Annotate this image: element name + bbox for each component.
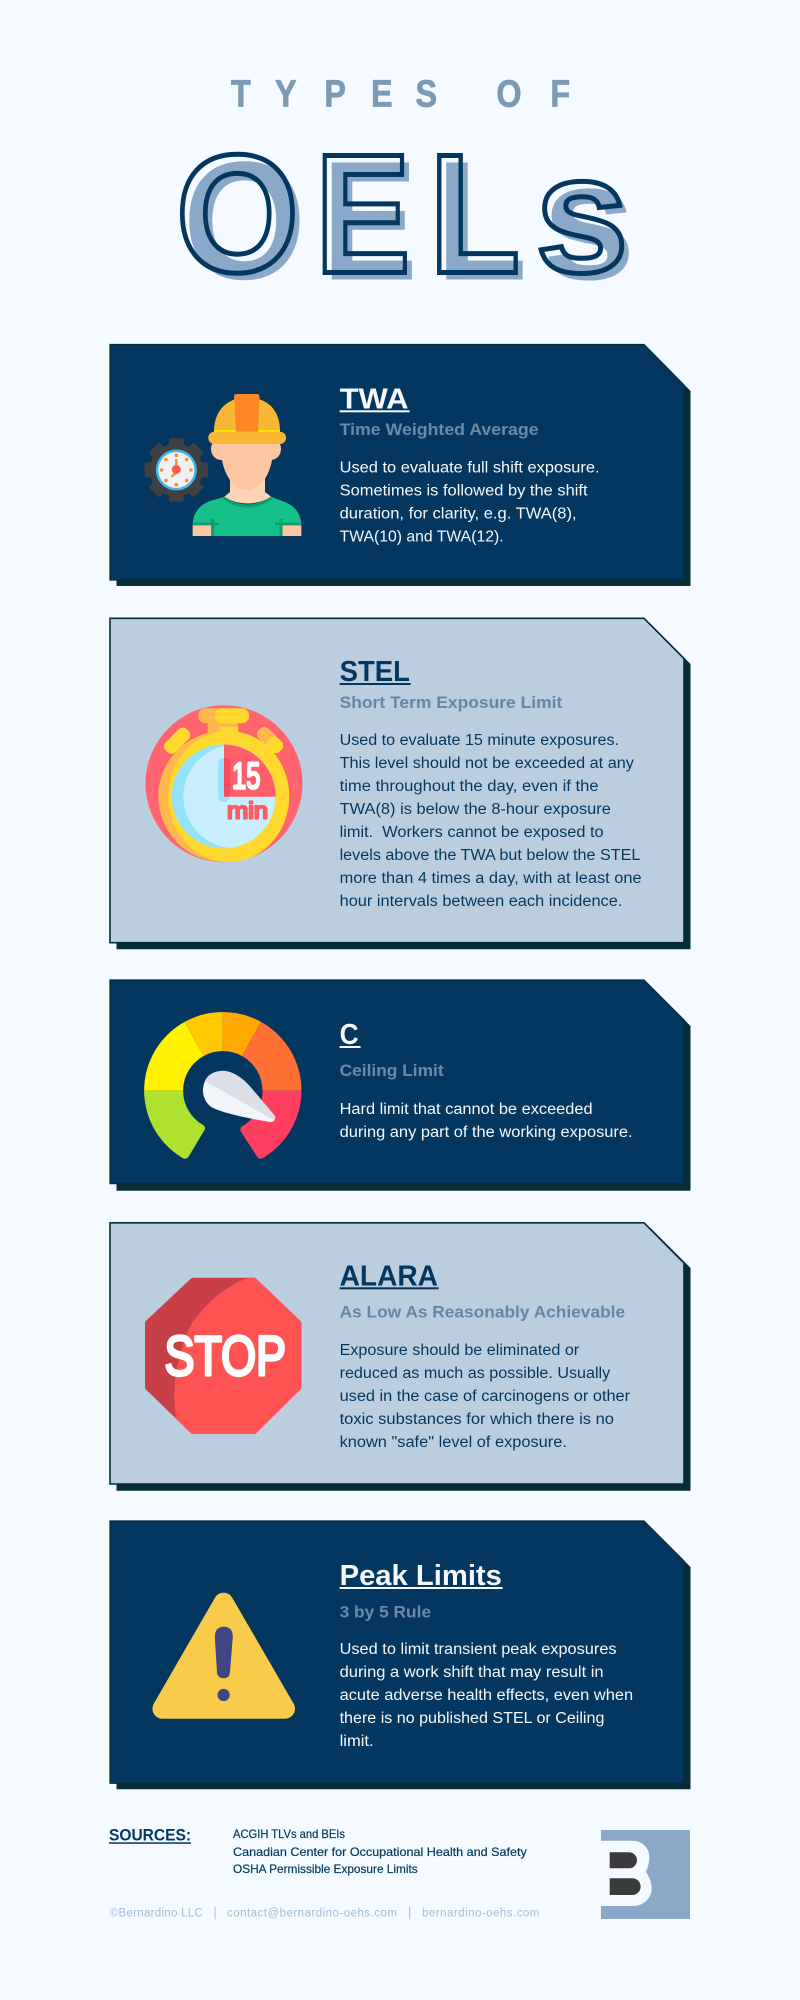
icon: warning triangle <box>162 1603 285 1709</box>
sources list: Canadian Center for Occupational Health and Safety <box>233 1845 527 1859</box>
subheading: Short Term Exposure Limit <box>340 693 563 712</box>
body text: Used to limit transient peak exposures <box>340 1641 617 1658</box>
body text: duration, for clarity, e.g. TWA(8), <box>340 506 577 523</box>
body text: Exposure should be eliminated or <box>340 1342 579 1359</box>
subheading: Time Weighted Average <box>340 420 539 439</box>
subheading: Ceiling Limit <box>340 1061 444 1080</box>
subheading: 3 by 5 Rule <box>340 1602 431 1621</box>
body text: TWA(8) is below the 8-hour exposure <box>340 801 611 818</box>
title: OELs: L <box>436 125 527 316</box>
card background <box>110 344 690 586</box>
title: OELs: E <box>322 127 417 316</box>
body text <box>340 1641 633 1750</box>
card background <box>110 980 690 1191</box>
icon: stop sign <box>148 1281 298 1431</box>
body text: during any part of the working exposure. <box>340 1124 633 1141</box>
heading: ALARA: ALARA <box>340 1260 438 1292</box>
body text <box>340 1342 630 1451</box>
title: OELs: O <box>183 126 306 315</box>
title: Types of: TYPES OF <box>231 73 570 115</box>
heading: STEL: STEL <box>340 656 410 688</box>
body text <box>340 732 642 910</box>
body text: levels above the TWA but below the STEL <box>340 847 641 864</box>
panel: ALARA <box>110 1223 690 1491</box>
body text: This level should not be exceeded at any <box>340 755 634 772</box>
body text: Used to evaluate 15 minute exposures. <box>340 732 619 749</box>
body text: Sometimes is followed by the shift <box>340 483 588 500</box>
icon: 15 minute stopwatch: min <box>227 797 268 823</box>
body text: toxic substances for which there is no <box>340 1411 614 1428</box>
heading: TWA: TWA <box>340 383 409 415</box>
icon: 15 minute stopwatch: 15 <box>232 755 260 797</box>
title: OELs: s <box>542 127 636 315</box>
body text: limit. <box>340 1733 374 1750</box>
sources list <box>233 1827 527 1876</box>
footer contact line: bernardino-oehs.com <box>422 1908 539 1920</box>
panel: Ceiling <box>110 980 690 1191</box>
sources list: OSHA Permissible Exposure Limits <box>233 1862 418 1876</box>
sources list: ACGIH TLVs and BEIs <box>233 1827 345 1841</box>
body text: time throughout the day, even if the <box>340 778 599 795</box>
body text: reduced as much as possible. Usually <box>340 1365 610 1382</box>
logo: Bernardino B <box>601 1830 690 1919</box>
card background <box>110 1223 690 1491</box>
title: OELs: O <box>176 119 299 308</box>
panel: TWA <box>110 344 690 586</box>
body text: TWA(10) and TWA(12). <box>340 529 504 546</box>
body text: used in the case of carcinogens or other <box>340 1388 630 1405</box>
title: OELs: s <box>535 120 629 308</box>
icon: stop sign: STOP <box>164 1324 286 1387</box>
footer contact line <box>110 1907 539 1920</box>
body text: acute adverse health effects, even when <box>340 1687 633 1704</box>
panel: STEL <box>110 618 690 949</box>
body text <box>340 1101 633 1141</box>
body text: there is no published STEL or Ceiling <box>340 1710 604 1727</box>
footer contact line: ©Bernardino LLC <box>110 1908 203 1920</box>
panel: Peak Limits <box>110 1521 690 1789</box>
icon: 15 minute stopwatch <box>146 705 302 862</box>
body text: hour intervals between each incidence. <box>340 893 622 910</box>
title: OELs <box>176 118 636 316</box>
body text: during a work shift that may result in <box>340 1664 604 1681</box>
subheading: As Low As Reasonably Achievable <box>340 1302 625 1321</box>
body text: known "safe" level of exposure. <box>340 1434 567 1451</box>
heading: Peak Limits: Peak Limits <box>340 1560 502 1592</box>
footer contact line: contact@bernardino-oehs.com <box>227 1908 397 1920</box>
body text <box>340 460 600 546</box>
sources heading: SOURCES: <box>109 1827 191 1845</box>
card background <box>110 1521 690 1789</box>
body text: more than 4 times a day, with at least one <box>340 870 642 887</box>
title: OELs: E <box>315 120 410 309</box>
card background <box>110 618 690 949</box>
body text: Hard limit that cannot be exceeded <box>340 1101 593 1118</box>
icon: worker with clock gear <box>145 394 301 536</box>
title: OELs: L <box>429 118 520 309</box>
body text: Used to evaluate full shift exposure. <box>340 460 600 477</box>
heading: C: C <box>340 1019 359 1051</box>
body text: limit. Workers cannot be exposed to <box>340 824 604 841</box>
icon: gauge <box>144 1012 302 1159</box>
